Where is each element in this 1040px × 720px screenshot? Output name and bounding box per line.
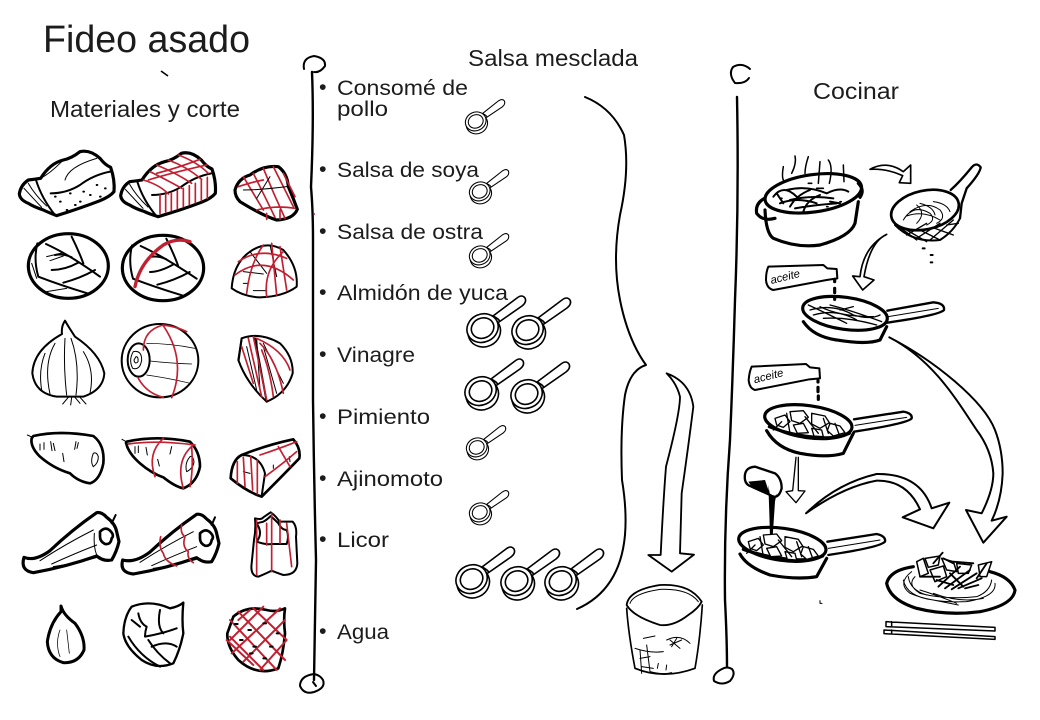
ingredient grid: lower rows	[23, 433, 300, 671]
arrow: vegetables pan to sauce pan	[786, 457, 805, 503]
icon: boiling pot	[756, 156, 864, 246]
item: consomé de pollo	[319, 75, 468, 121]
item: vinagre: •	[319, 342, 327, 366]
stray mark	[820, 601, 822, 603]
icon: oil bottle and drips	[766, 265, 837, 299]
icon: pepper with cuts	[122, 514, 219, 574]
icon: cabbage half	[232, 243, 297, 297]
icon: pan with noodles	[801, 292, 944, 342]
measuring spoons	[451, 100, 604, 605]
icon: pouring cup	[745, 467, 782, 537]
icon: garlic clove	[47, 606, 84, 663]
item: salsa de ostra: Salsa de ostra	[337, 220, 483, 244]
item: licor	[319, 527, 389, 552]
icon: yuca with cuts	[122, 438, 200, 488]
item: salsa de ostra: •	[319, 219, 327, 243]
item: pimiento: Pimiento	[337, 405, 430, 429]
icon: whole meat	[19, 151, 114, 216]
item: pimiento: •	[319, 404, 327, 428]
item: licor: Licor	[337, 528, 389, 552]
brace grouping the sauce ingredients	[577, 97, 646, 609]
icon: pepper ring	[251, 512, 297, 577]
panel: cocinar	[737, 78, 1015, 639]
icon: tablespoons, vinagre	[460, 359, 570, 418]
item: consomé de pollo: •	[319, 75, 327, 99]
item: agua	[319, 619, 389, 644]
icon: pan with vegetables	[763, 400, 912, 456]
item: salsa de soya: Salsa de soya	[337, 158, 479, 182]
ingredient grid: upper rows	[19, 151, 297, 405]
item: agua: Agua	[337, 620, 389, 644]
item: almidón de yuca: Almidón de yuca	[337, 281, 508, 305]
icon: teaspoon, pimiento	[463, 426, 506, 463]
panel: salsa mesclada	[319, 45, 702, 674]
title: Fideo asado	[43, 19, 250, 61]
icon: oil bottle and drips, second	[749, 364, 820, 399]
cooking steps, upper	[749, 156, 981, 456]
arrow: pot to strainer	[870, 165, 911, 183]
red stray dot	[313, 213, 315, 215]
divider: left scroll line	[300, 56, 325, 693]
icon: oil bottle and drips, second: aceite	[752, 367, 785, 386]
icon: whole yuca	[27, 433, 104, 483]
item: consomé de pollo: pollo	[337, 97, 388, 121]
item: salsa de soya: •	[319, 157, 327, 181]
icon: mixing glass	[627, 585, 702, 674]
arrow: sauce pan to plate	[806, 474, 949, 528]
icon: teaspoon, consomé	[462, 100, 505, 137]
icon: teaspoon, ajinomoto	[466, 491, 509, 528]
icon: whole cabbage	[28, 234, 108, 298]
icon: plate of noodles	[887, 553, 1015, 613]
divider: right scroll line	[714, 65, 750, 683]
item: ajinomoto: Ajinomoto	[337, 467, 443, 491]
item: ajinomoto: •	[319, 466, 327, 490]
item: agua: •	[319, 619, 327, 643]
icon: pan with sauce	[737, 522, 885, 578]
icon: yuca chunk	[231, 439, 300, 497]
panel: materiales y corte	[19, 96, 300, 671]
arrow: strainer to pan	[853, 234, 887, 290]
icon: oil bottle and drips: aceite	[769, 268, 801, 287]
icon: tablespoons, almidón	[462, 296, 571, 354]
icon: whole pepper	[23, 513, 119, 573]
icon: cabbage with cut	[122, 235, 204, 301]
heading: cocinar: Cocinar	[813, 78, 899, 104]
icon: strainer	[887, 164, 981, 262]
icon: meat slice	[235, 166, 297, 220]
arrow: sauce to glass	[648, 373, 694, 572]
item: licor: •	[319, 527, 327, 551]
item: vinagre: Vinagre	[337, 343, 415, 367]
ingredient list	[319, 75, 508, 644]
item: almidón de yuca: •	[319, 280, 327, 304]
icon: teaspoon, ostra	[466, 234, 509, 271]
icon: whole onion	[32, 321, 104, 405]
heading: materiales y corte: Materiales y corte	[50, 96, 240, 122]
icon: crushed garlic	[123, 603, 183, 667]
icon: tablespoons, licor	[451, 547, 604, 605]
icon: meat with cut lines	[121, 153, 216, 217]
icon: chopsticks	[884, 622, 995, 639]
item: consomé de pollo: Consomé de	[337, 76, 468, 100]
icon: teaspoon, soya	[466, 170, 509, 207]
cooking steps, lower	[737, 337, 1015, 639]
icon: chopped garlic	[227, 607, 287, 671]
arrow: pan to plate, long	[889, 337, 1007, 543]
icon: onion wedge	[238, 336, 293, 402]
heading: salsa mesclada: Salsa mesclada	[468, 45, 638, 71]
icon: onion with cuts	[122, 324, 198, 398]
stray tick mark	[161, 71, 168, 76]
